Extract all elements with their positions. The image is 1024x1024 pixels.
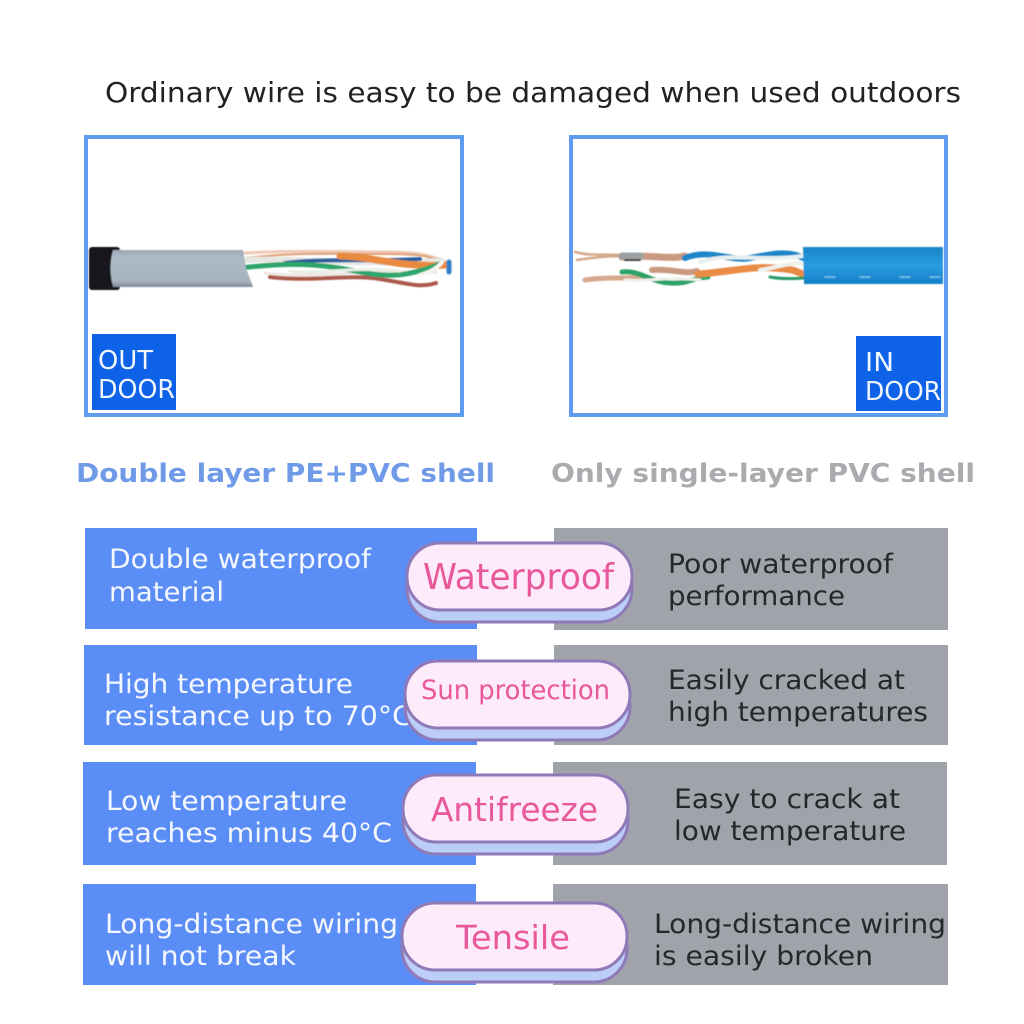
text: long-distance easily broken: is easily broken xyxy=(654,941,873,972)
text: poor waterproof performance xyxy=(668,549,895,612)
icon: outdoor cable xyxy=(89,247,450,290)
label: out door: OUT xyxy=(98,346,153,376)
row: tensile xyxy=(83,884,948,985)
label: in door: DOOR xyxy=(865,377,941,407)
badge: tensile: Tensile xyxy=(455,918,570,957)
text: easy to crack xyxy=(674,784,906,847)
text: poor waterproof performance: performance xyxy=(668,581,845,612)
badge: antifreeze xyxy=(403,775,628,854)
label: in door: IN xyxy=(865,348,894,378)
text: poor waterproof performance: Poor waterproof xyxy=(668,549,895,580)
text: high temperature resistance xyxy=(104,669,412,732)
label: in door xyxy=(856,336,941,411)
row: antifreeze xyxy=(83,762,947,865)
text: long-distance will not break xyxy=(105,909,398,972)
badge: tensile xyxy=(402,903,627,982)
badge: sun protection: Sun protection xyxy=(421,675,610,706)
text: double waterproof material xyxy=(109,544,373,608)
text: long-distance will not break: Long-distance wiring xyxy=(105,909,398,940)
text: long-distance easily broken: Long-distance wiring xyxy=(654,909,946,940)
text: double waterproof material: Double waterproof xyxy=(109,544,373,575)
text: low temperature reach xyxy=(106,786,392,849)
text: low temperature reach: reaches minus 40°C xyxy=(106,818,392,849)
badge: sun protection xyxy=(405,661,630,740)
text: easily cracked xyxy=(668,665,928,728)
row: waterproof xyxy=(85,528,948,630)
text: easy to crack: Easy to crack at xyxy=(674,784,900,815)
text: long-distance easily broken xyxy=(654,909,946,972)
text: easily cracked: Easily cracked at xyxy=(668,665,905,696)
text: easy to crack: low temperature xyxy=(674,816,906,847)
text: high temperature resistance: resistance up to 70°C xyxy=(104,701,412,732)
icon: indoor cable xyxy=(575,247,943,284)
row: sun protection xyxy=(84,645,948,745)
badge: antifreeze: Antifreeze xyxy=(431,790,598,829)
panel: indoor cable photo xyxy=(571,137,946,415)
text: easily cracked: high temperatures xyxy=(668,697,928,728)
badge: waterproof xyxy=(407,543,632,622)
text: high temperature resistance: High temperature xyxy=(104,669,353,700)
heading: indoor shell: Only single-layer PVC shell xyxy=(551,459,975,489)
title: Ordinary wire is easy to be damaged when used outdoors xyxy=(105,76,961,109)
label: out door xyxy=(92,334,176,410)
panel: outdoor cable photo xyxy=(86,137,462,415)
text: double waterproof material: material xyxy=(109,577,224,608)
text: long-distance will not break: will not break xyxy=(105,941,296,972)
text: low temperature reach: Low temperature xyxy=(106,786,347,817)
heading: outdoor shell: Double layer PE+PVC shell xyxy=(76,459,495,489)
label: out door: DOOR xyxy=(98,375,175,405)
badge: waterproof: Waterproof xyxy=(423,557,615,598)
